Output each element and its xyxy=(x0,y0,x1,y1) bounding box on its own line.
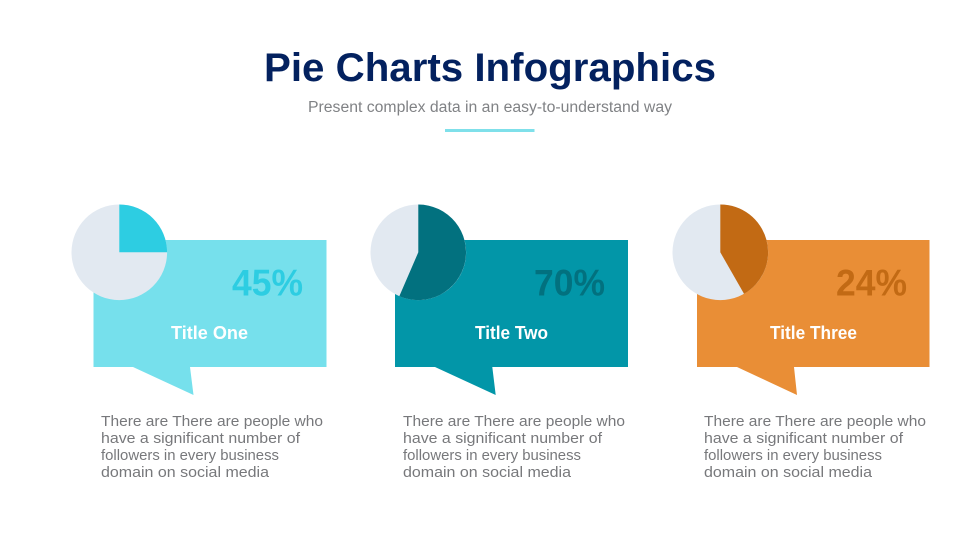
card title three: Title Three xyxy=(770,323,857,343)
description three xyxy=(704,414,926,481)
pie chart three xyxy=(672,204,768,300)
description one: have a significant number of xyxy=(101,431,301,447)
description three: followers in every business xyxy=(704,448,882,464)
title: Pie Charts Infographics xyxy=(264,46,716,90)
speech bubble three xyxy=(697,240,930,395)
description two: have a significant number of xyxy=(403,431,603,447)
subtitle: Present complex data in an easy-to-understand way xyxy=(308,99,672,116)
description one xyxy=(101,414,323,481)
description three: domain on social media xyxy=(704,465,873,481)
description two xyxy=(403,414,625,481)
card title two: Title Two xyxy=(475,323,548,343)
panel: title three xyxy=(672,204,930,481)
card title one: Title One xyxy=(171,323,248,343)
description two: domain on social media xyxy=(403,465,572,481)
percentage three: 24% xyxy=(836,262,907,304)
description one: domain on social media xyxy=(101,465,270,481)
description two: There are There are people who xyxy=(403,414,625,430)
description one: There are There are people who xyxy=(101,414,323,430)
pie chart two xyxy=(370,204,466,300)
description three: have a significant number of xyxy=(704,431,904,447)
percentage one: 45% xyxy=(232,262,303,304)
title underline accent xyxy=(445,129,534,132)
speech bubble one xyxy=(94,240,326,395)
speech bubble two xyxy=(395,240,628,395)
panel: title one xyxy=(72,204,326,481)
description three: There are There are people who xyxy=(704,414,926,430)
description one: followers in every business xyxy=(101,448,279,464)
description two: followers in every business xyxy=(403,448,581,464)
percentage two: 70% xyxy=(534,262,605,304)
pie chart one xyxy=(72,204,167,300)
panel: title two xyxy=(370,204,628,481)
